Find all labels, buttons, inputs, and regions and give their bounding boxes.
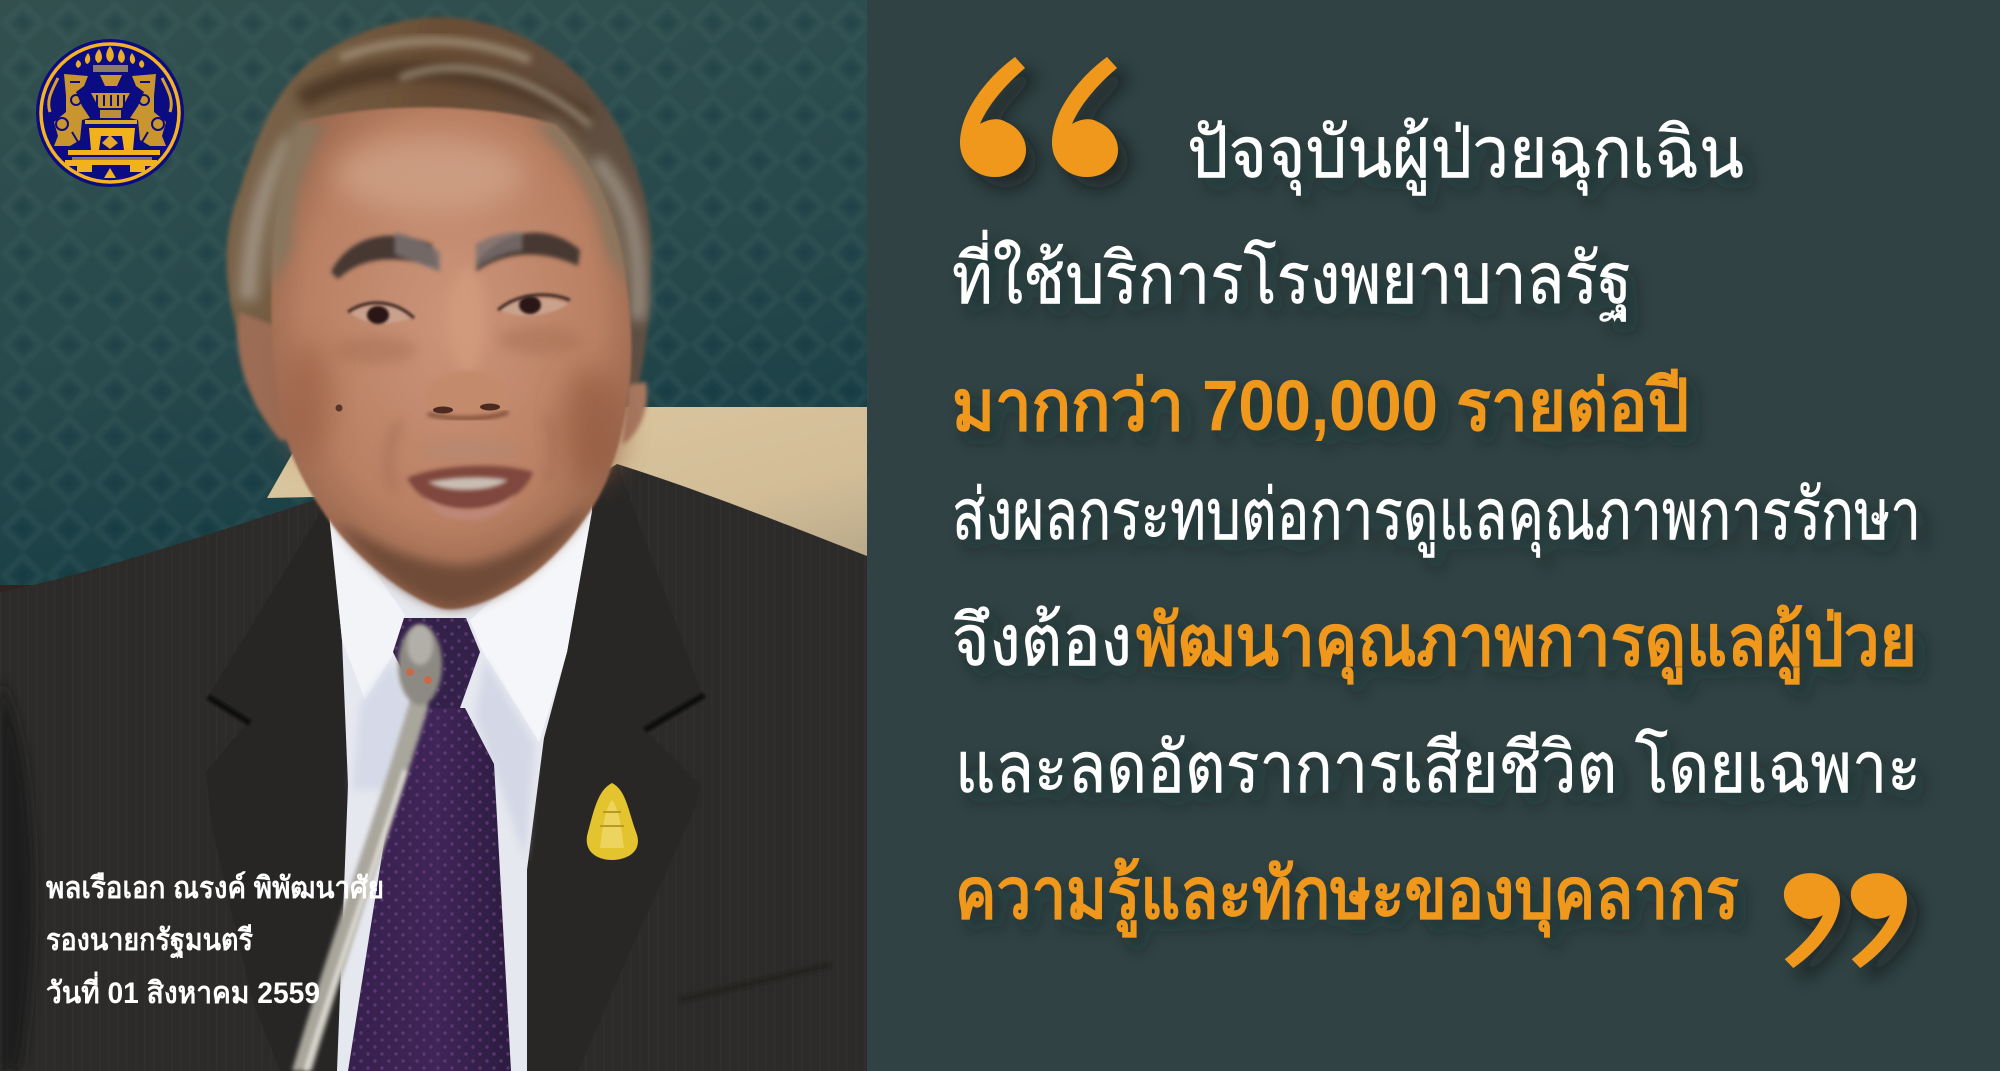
- quote line 1: ปัจจุบันผู้ป่วยฉุกเฉิน: [1187, 114, 1744, 196]
- necktie: [348, 618, 511, 1071]
- hair: [226, 17, 651, 395]
- eyebrows: [331, 232, 580, 279]
- shirt and collar: [328, 500, 592, 1071]
- quote line 7 highlight: ความรู้และทักษะของบุคลากร: [955, 855, 1739, 938]
- eyes: [348, 295, 570, 324]
- wallpaper background: [0, 0, 867, 605]
- caption line 2: รองนายกรัฐมนตรี: [46, 924, 253, 960]
- microphone: [292, 625, 442, 1071]
- logo: government seal: [36, 39, 184, 187]
- chair back: [267, 407, 867, 558]
- icon: opening quotation mark: [960, 57, 1118, 177]
- quote text block: [952, 57, 1921, 968]
- mouth: [407, 440, 533, 520]
- photo: speaker portrait: [0, 0, 867, 1071]
- ears: [238, 312, 647, 445]
- nose: [388, 268, 554, 490]
- quote line 5 lead: จึงต้อง: [952, 602, 1132, 681]
- caption: speaker name and date: [46, 871, 384, 1010]
- icon: closing quotation mark: [1784, 873, 1907, 968]
- quote line 2: ที่ใช้บริการโรงพยาบาลรัฐ: [952, 230, 1632, 321]
- lapel pin: [587, 783, 638, 860]
- caption line 1: พลเรือเอก ณรงค์ พิพัฒนาศัย: [46, 871, 384, 905]
- right panel background: [867, 0, 2000, 1071]
- caption line 3: วันที่ 01 สิงหาคม 2559: [46, 971, 320, 1010]
- seal lions: [49, 74, 171, 146]
- quote line 3 highlight: มากกว่า 700,000 รายต่อปี: [952, 367, 1689, 446]
- face: [271, 107, 631, 609]
- forehead corner hair: [271, 120, 630, 290]
- seal flames: [76, 46, 144, 68]
- suit jacket: [0, 464, 867, 1071]
- quote line 5 highlight: พัฒนาคุณภาพการดูแลผู้ป่วย: [1136, 602, 1917, 685]
- seal urn: [65, 65, 160, 178]
